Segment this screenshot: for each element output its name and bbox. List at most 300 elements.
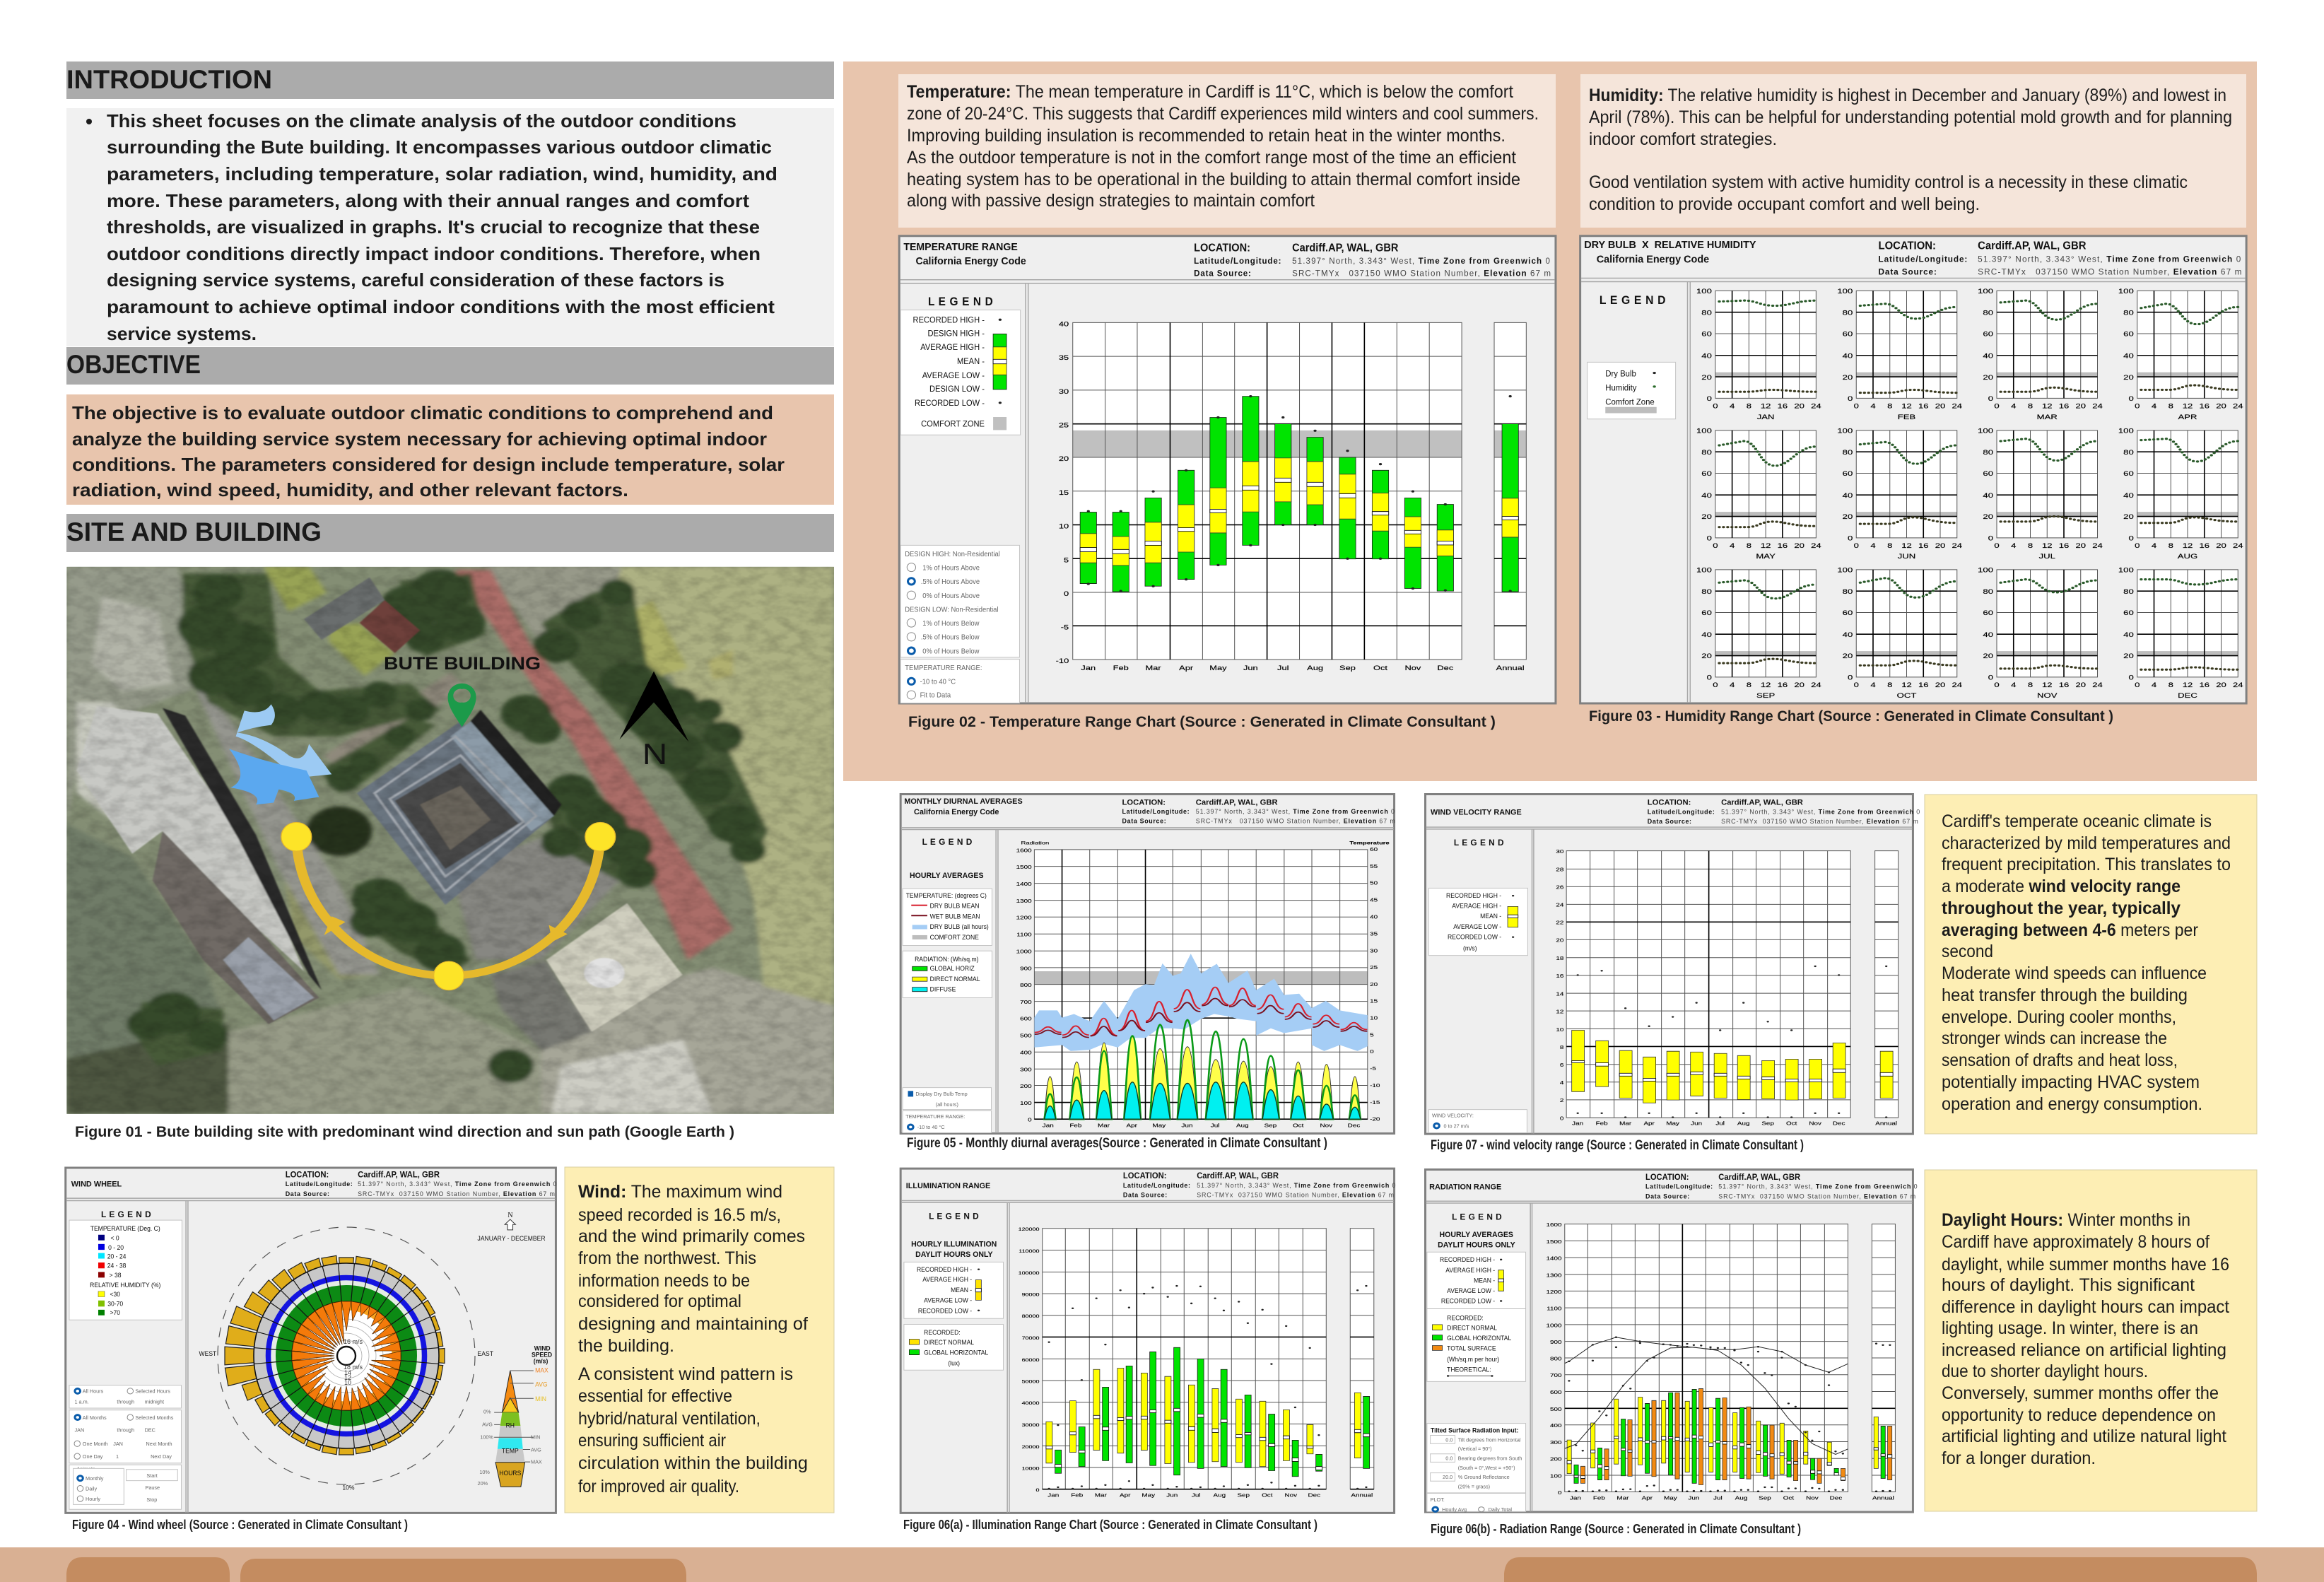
december panel: 0 [2128, 674, 2134, 681]
figure 06a: illumination range chart: ILLUMINATION RANGE [906, 1182, 990, 1190]
plot: Oct [1293, 1123, 1304, 1128]
legend: MEAN - [1480, 913, 1501, 920]
plot: Jun [1182, 1123, 1193, 1128]
figure 04: wind wheel chart: Latitude/Longitude: [286, 1180, 353, 1188]
legend: DESIGN HIGH - [928, 329, 985, 339]
legend: L E G E N D [101, 1209, 151, 1219]
february panel: 80 [1843, 310, 1853, 317]
wind velocity note: second [1942, 942, 1993, 961]
february panel: 4 [1870, 403, 1876, 410]
plot: 35 [1059, 355, 1069, 362]
august panel: 40 [2123, 492, 2134, 499]
plot: 20 [1059, 455, 1069, 463]
legend: Hourly Avg [1442, 1506, 1467, 1513]
legend: DRY BULB MEAN [930, 903, 979, 910]
plot: 25 [1370, 964, 1378, 971]
plot: Dec [1308, 1492, 1321, 1498]
legend: RADIATION: (Wh/sq.m) [915, 956, 979, 963]
legend: (Wh/sq.m per hour) [1447, 1356, 1499, 1363]
plot: 100 [1020, 1100, 1032, 1106]
august panel: 60 [2123, 471, 2134, 478]
legend: AVERAGE HIGH - [920, 344, 985, 352]
plot: Sep [1264, 1123, 1277, 1128]
plot: Mar [1616, 1495, 1629, 1501]
legend: GLOBAL HORIZONTAL [1447, 1335, 1511, 1342]
february panel: 8 [1887, 403, 1892, 410]
plot: 1100 [1547, 1306, 1562, 1311]
legend [903, 837, 992, 1132]
figure 03: humidity range chart: California Energy Code [1597, 254, 1709, 266]
daylight hours note: lighting usage. In winter, there is an [1942, 1318, 2198, 1338]
figure 06b: radiation range chart: Data Source: [1645, 1193, 1690, 1200]
march panel: 20 [2075, 403, 2086, 410]
plot: Oct [1262, 1492, 1273, 1498]
april panel: 12 [2183, 403, 2193, 410]
february panel: 24 [1952, 403, 1963, 410]
december panel: 24 [2233, 682, 2243, 689]
figure 07: wind velocity range chart: LOCATION: [1648, 799, 1691, 807]
november panel: 12 [2042, 682, 2053, 689]
february panel: 20 [1843, 374, 1853, 381]
wind note: hybrid/natural ventilation, [578, 1409, 761, 1429]
plot: Mar [1146, 665, 1161, 672]
october panel [1837, 567, 1963, 700]
plot: Nov [1320, 1123, 1333, 1128]
legend: (Vertical = 90°) [1458, 1446, 1492, 1452]
plot: May [1142, 1492, 1156, 1498]
wind note: circulation within the building [578, 1453, 808, 1473]
temperature note: As the outdoor temperature is not in the comfort range most of the time an efficient [907, 148, 1516, 168]
plot: 10 [1556, 1026, 1564, 1032]
time controls: through [117, 1398, 134, 1405]
figure 02: temperature range chart: LOCATION: [1194, 242, 1250, 254]
march panel: MAR [2037, 414, 2058, 421]
legend: RECORDED LOW - [1441, 1297, 1495, 1305]
figure 07: wind velocity range chart: WIND VELOCITY RANGE [1431, 808, 1522, 817]
plot [1016, 840, 1390, 1128]
plot: 5 [1370, 1032, 1374, 1038]
legend: (20% = grass) [1458, 1483, 1490, 1489]
legend: RECORDED: [924, 1329, 961, 1336]
figure 01 caption: Figure 01 - Bute building site with predominant wind direction and sun path (Google Earth ) [75, 1124, 734, 1140]
june panel: JUN [1898, 553, 1915, 561]
temperature note: Temperature: The mean temperature in Cardiff is 11°C, which is below the comfort [907, 82, 1513, 102]
legend: HOURLY ILLUMINATION [911, 1240, 997, 1249]
march panel: 100 [1978, 288, 1993, 295]
plot: 1300 [1547, 1272, 1562, 1278]
january panel: 4 [1730, 403, 1735, 410]
may panel: 80 [1701, 449, 1712, 456]
time controls: JAN [74, 1426, 84, 1433]
wind speed key: AVG [531, 1446, 541, 1453]
site and building heading [66, 514, 834, 552]
wind speed key: 100% [480, 1434, 493, 1440]
figure 02 caption: Figure 02 - Temperature Range Chart (Source : Generated in Climate Consultant ) [908, 714, 1496, 730]
legend: WIND VELOCITY: [1432, 1112, 1474, 1119]
november panel: 60 [1983, 610, 1993, 617]
figure 05 caption: Figure 05 - Monthly diurnal averages(Source : Generated in Climate Consultant ) [907, 1136, 1327, 1151]
march panel: 12 [2042, 403, 2053, 410]
january panel: 12 [1761, 403, 1771, 410]
january panel: 0 [1713, 403, 1718, 410]
daylight hours note: opportunity to reduce dependence on [1942, 1405, 2216, 1425]
july panel: 60 [1983, 471, 1993, 478]
legend: % Ground Reflectance [1458, 1474, 1510, 1480]
legend: Comfort Zone [1605, 397, 1655, 407]
march panel [1978, 288, 2103, 421]
plot: Feb [1113, 665, 1129, 672]
time controls: JAN [113, 1441, 123, 1447]
time controls: Monthly [86, 1475, 104, 1482]
may panel: 100 [1696, 428, 1712, 435]
november panel: 20 [2075, 682, 2086, 689]
legend: L E G E N D [928, 296, 993, 308]
october panel: 100 [1837, 567, 1853, 574]
plot: 1200 [1547, 1289, 1562, 1294]
legend: HOURLY AVERAGES [910, 872, 984, 880]
wind speed key: AVG [535, 1381, 548, 1388]
plot: 10 [1059, 523, 1069, 530]
october panel: 60 [1843, 610, 1853, 617]
plot: Dec [1437, 665, 1454, 672]
figure 05: monthly diurnal averages chart: 51.397° North, 3.343° West, Time Zone from Greenwich 0 [1196, 808, 1395, 815]
plot: Sep [1761, 1120, 1774, 1126]
october panel: 0 [1848, 674, 1853, 681]
design options panel: TEMPERATURE RANGE: [905, 664, 982, 672]
legend [1427, 1212, 1526, 1513]
plot: 55 [1370, 863, 1378, 869]
legend: MEAN - [957, 358, 985, 366]
legend: L E G E N D [1600, 294, 1666, 307]
figure 04: wind wheel chart: LOCATION: [286, 1171, 329, 1180]
plot: 110000 [1019, 1248, 1040, 1254]
december panel: 12 [2183, 682, 2193, 689]
design options panel: -10 to 40 °C [920, 678, 956, 686]
plot: 0 [1370, 1049, 1374, 1055]
august panel [2118, 428, 2243, 561]
figure 05: monthly diurnal averages chart: Latitude/Longitude: [1122, 808, 1190, 815]
plot: 18 [1556, 956, 1564, 961]
january panel: 40 [1701, 353, 1712, 360]
september panel: 12 [1761, 682, 1771, 689]
plot: 15 [1059, 489, 1069, 496]
legend: Tilted Surface Radiation Input: [1431, 1426, 1518, 1434]
daylight hours note: Conversely, summer months offer the [1942, 1383, 2219, 1403]
figure 05: monthly diurnal averages chart: Data Source: [1122, 818, 1166, 825]
plot: May [1209, 665, 1227, 672]
march panel: 40 [1983, 353, 1993, 360]
design options panel: DESIGN LOW: Non-Residential [905, 606, 999, 614]
time controls: 1 [116, 1453, 119, 1460]
plot: 70000 [1022, 1335, 1040, 1341]
figure 05: monthly diurnal averages chart: California Energy Code [914, 808, 999, 816]
wind note: from the northwest. This [578, 1248, 756, 1268]
time controls: Pause [146, 1484, 160, 1491]
plot: 50000 [1022, 1379, 1040, 1384]
figure 03: humidity range chart [1580, 236, 2246, 703]
september panel: 100 [1696, 567, 1712, 574]
temperature note: along with passive design strategies to maintain comfort [907, 191, 1315, 211]
figure 04: wind wheel chart: 51.397° North, 3.343° West, Time Zone from Greenwich 0 [358, 1180, 557, 1188]
wind note: the building. [578, 1336, 674, 1356]
wind speed key: MIN [535, 1395, 546, 1402]
november panel: 20 [1983, 653, 1993, 660]
time controls: Daily [86, 1485, 97, 1492]
introduction heading [66, 61, 834, 99]
daylight hours note: due to shorter daylight hours. [1942, 1361, 2148, 1381]
february panel: 12 [1901, 403, 1912, 410]
design options panel [900, 545, 1019, 703]
figure 04: wind wheel chart [66, 1168, 557, 1513]
figure 03: humidity range chart: LOCATION: [1878, 240, 1936, 252]
time controls: Next Day [151, 1453, 172, 1460]
january panel: 80 [1701, 310, 1712, 317]
july panel: 8 [2028, 543, 2033, 550]
figure 04 caption: Figure 04 - Wind wheel (Source : Generated in Climate Consultant ) [72, 1518, 408, 1532]
august panel: AUG [2178, 553, 2197, 561]
introduction text panel: This sheet focuses on the climate analysis of the outdoor conditions [107, 110, 736, 131]
february panel: 0 [1854, 403, 1859, 410]
legend: Tilt degrees from Horizontal [1458, 1436, 1521, 1443]
wind velocity note: throughout the year, typically [1942, 898, 2181, 918]
legend: RECORDED HIGH - [913, 316, 985, 324]
plot: Oct [1373, 665, 1388, 672]
plot: Sep [1237, 1492, 1250, 1498]
time controls: Selected Hours [135, 1388, 170, 1394]
figure 07: wind velocity range chart: Data Source: [1648, 818, 1692, 825]
may panel: 0 [1707, 535, 1712, 542]
time controls: 1 a.m. [74, 1398, 89, 1405]
wind velocity note: potentially impacting HVAC system [1942, 1072, 2200, 1092]
july panel: 20 [2075, 543, 2086, 550]
legend: L E G E N D [929, 1211, 979, 1221]
plot: Apr [1126, 1123, 1137, 1128]
daylight hours note: increased reliance on artificial lighting [1942, 1340, 2226, 1360]
plot: Jan [1047, 1492, 1059, 1498]
wind velocity note: operation and energy consumption. [1942, 1094, 2202, 1114]
april panel: 0 [2128, 396, 2134, 403]
february panel: 0 [1848, 396, 1853, 403]
plot: Apr [1179, 665, 1193, 672]
december panel: 100 [2118, 567, 2134, 574]
legend: AVERAGE LOW - [1447, 1287, 1495, 1294]
september panel: 20 [1701, 653, 1712, 660]
plot: 20000 [1022, 1444, 1040, 1449]
figure 02: temperature range chart: Data Source: [1194, 268, 1252, 279]
legend: GLOBAL HORIZONTAL [924, 1349, 988, 1357]
plot: Mar [1098, 1123, 1110, 1128]
plot: Jan [1043, 1123, 1054, 1128]
may panel: 60 [1701, 471, 1712, 478]
july panel: 4 [2011, 543, 2017, 550]
plot: Nov [1806, 1495, 1819, 1501]
daylight hours note: artificial lighting and utilize natural light [1942, 1426, 2226, 1446]
april panel: 100 [2118, 288, 2134, 295]
plot: Oct [1783, 1495, 1795, 1501]
october panel: 8 [1887, 682, 1892, 689]
wind speed key: 20% [478, 1480, 488, 1487]
wind velocity note: Moderate wind speeds can influence [1942, 963, 2207, 983]
november panel: 4 [2011, 682, 2017, 689]
december panel: 8 [2169, 682, 2173, 689]
figure 05: monthly diurnal averages chart: Cardiff.AP, WAL, GBR [1196, 798, 1278, 807]
plot: 600 [1020, 1016, 1032, 1021]
december panel: 20 [2123, 653, 2134, 660]
introduction text panel [66, 108, 834, 346]
plot: 40 [1370, 914, 1378, 920]
legend: 0 to 27 m/s [1443, 1123, 1469, 1129]
humidity note: Good ventilation system with active humidity control is a necessity in these climatic [1589, 172, 2188, 192]
july panel: 24 [2092, 543, 2103, 550]
plot [1056, 321, 1526, 672]
location pin [448, 684, 476, 727]
plot [1019, 1226, 1374, 1498]
wheel labels: WEST [199, 1350, 217, 1357]
legend: AVERAGE HIGH - [1445, 1267, 1495, 1274]
wind speed key: 0% [483, 1408, 491, 1415]
plot: 14 [1556, 991, 1564, 997]
plot: Jan [1570, 1495, 1581, 1501]
plot: 60 [1370, 846, 1378, 852]
april panel: 16 [2199, 403, 2209, 410]
legend [904, 1211, 1004, 1370]
time controls: Hourly [86, 1496, 100, 1502]
plot: 90000 [1022, 1292, 1040, 1297]
plot: Nov [1809, 1120, 1822, 1126]
legend: (m/s) [1463, 944, 1477, 952]
plot: Sep [1759, 1495, 1771, 1501]
time controls: Animate [76, 1465, 95, 1472]
legend: Daily Total [1489, 1506, 1512, 1513]
design options panel: 1% of Hours Below [922, 620, 980, 628]
legend: 20.0 [1443, 1474, 1452, 1480]
plot: 24 [1556, 902, 1564, 908]
wind direction arrows [229, 704, 331, 804]
objective heading [66, 347, 834, 385]
february panel: 20 [1935, 403, 1945, 410]
january panel: 16 [1778, 403, 1788, 410]
april panel: 4 [2152, 403, 2157, 410]
figure 02: temperature range chart: TEMPERATURE RANGE [903, 242, 1018, 253]
plot: 35 [1370, 931, 1378, 937]
wind note: and the wind primarily comes [578, 1226, 805, 1246]
wind speed key: SPEED [532, 1351, 552, 1359]
plot: 12 [1556, 1009, 1564, 1014]
figure 06a: illumination range chart: 51.397° North, 3.343° West, Time Zone from Greenwich 0 [1197, 1182, 1396, 1189]
april panel: 80 [2123, 310, 2134, 317]
figure 03: humidity range chart: SRC-TMYx 037150 WMO Station Number, Elevation 67 m [1978, 266, 2243, 276]
wheel labels: N [507, 1212, 513, 1219]
north arrow [619, 672, 688, 771]
april panel: APR [2178, 414, 2197, 421]
objective text panel: radiation, wind speed, humidity, and other relevant factors. [72, 479, 628, 500]
plot: 300 [1550, 1439, 1562, 1446]
time controls: Next Month [146, 1441, 172, 1447]
legend: L E G E N D [1452, 1212, 1502, 1222]
time controls: DEC [145, 1426, 156, 1433]
july panel: 0 [1994, 543, 2000, 550]
legend: DRY BULB (all hours) [930, 923, 989, 930]
plot: 45 [1370, 897, 1378, 903]
humidity note: April (78%). This can be helpful for understanding potential mold growth and for planning [1589, 107, 2232, 127]
plot: 800 [1020, 982, 1032, 988]
august panel: 0 [2128, 535, 2134, 542]
plot: Annual [1872, 1495, 1894, 1501]
october panel: 12 [1901, 682, 1912, 689]
figure 06a: illumination range chart [900, 1168, 1396, 1513]
plot: May [1153, 1123, 1166, 1128]
wind speed key: MAX [535, 1367, 548, 1374]
wind note: for improved air quality. [578, 1477, 739, 1496]
plot: Jun [1688, 1495, 1700, 1501]
wind note: speed recorded is 16.5 m/s, [578, 1205, 781, 1225]
plot [1547, 1221, 1895, 1501]
legend: DIRECT NORMAL [1447, 1324, 1497, 1331]
legend: RECORDED HIGH - [917, 1266, 972, 1273]
legend: 20 - 24 [107, 1253, 127, 1260]
march panel: 8 [2028, 403, 2033, 410]
september panel: 4 [1730, 682, 1735, 689]
wheel labels: 10% [342, 1484, 355, 1491]
legend: RECORDED LOW - [915, 399, 985, 408]
figure 02: temperature range chart: Cardiff.AP, WAL, GBR [1292, 242, 1398, 254]
legend: 0.0 [1445, 1436, 1452, 1443]
plot: Jul [1713, 1495, 1723, 1501]
design options panel: 1% of Hours Above [922, 564, 980, 572]
plot: 0 [1560, 1115, 1564, 1121]
plot: Nov [1284, 1492, 1298, 1498]
legend: 30-70 [107, 1300, 123, 1307]
august panel: 0 [2135, 543, 2140, 550]
november panel: 16 [2059, 682, 2069, 689]
figure 06b: radiation range chart: SRC-TMYx 037150 WMO Station Number, Elevation 67 m [1718, 1193, 1916, 1200]
plot: 40 [1059, 321, 1069, 328]
legend: PLOT: [1431, 1496, 1445, 1503]
november panel: 80 [1983, 588, 1993, 595]
may panel: 4 [1730, 543, 1735, 550]
legend: 0.0 [1445, 1455, 1452, 1462]
climate findings panel [843, 61, 2257, 781]
june panel: 40 [1843, 492, 1853, 499]
august panel: 20 [2216, 543, 2226, 550]
plot: 900 [1550, 1339, 1562, 1345]
wind speed key: AVG [482, 1421, 493, 1428]
october panel: 80 [1843, 588, 1853, 595]
plot: Oct [1786, 1120, 1797, 1126]
november panel: 0 [1988, 674, 1993, 681]
wind note: A consistent wind pattern is [578, 1364, 793, 1384]
daylight hours note: difference in daylight hours can impact [1942, 1297, 2229, 1317]
plot: Temperature [1349, 840, 1390, 845]
wind note: Wind: The maximum wind [578, 1182, 782, 1202]
wind velocity note: envelope. During cooler months, [1942, 1007, 2176, 1027]
legend: MEAN - [1474, 1277, 1495, 1284]
april panel: 20 [2216, 403, 2226, 410]
july panel: 40 [1983, 492, 1993, 499]
time controls: through [117, 1426, 134, 1433]
january panel: 24 [1811, 403, 1821, 410]
introduction text panel: parameters, including temperature, solar radiation, wind, humidity, and [107, 163, 777, 184]
figure 05: monthly diurnal averages chart: LOCATION: [1122, 798, 1166, 807]
temperature note: Improving building insulation is recommended to retain heat in the winter months. [907, 126, 1506, 146]
july panel: 16 [2059, 543, 2069, 550]
figure 07: wind velocity range chart [1426, 795, 1920, 1134]
plot: -10 [1370, 1082, 1380, 1089]
plot: Annual [1351, 1492, 1373, 1498]
time controls: Selected Months [135, 1414, 174, 1421]
legend: COMFORT ZONE [930, 934, 979, 941]
plot: Sep [1339, 665, 1356, 672]
